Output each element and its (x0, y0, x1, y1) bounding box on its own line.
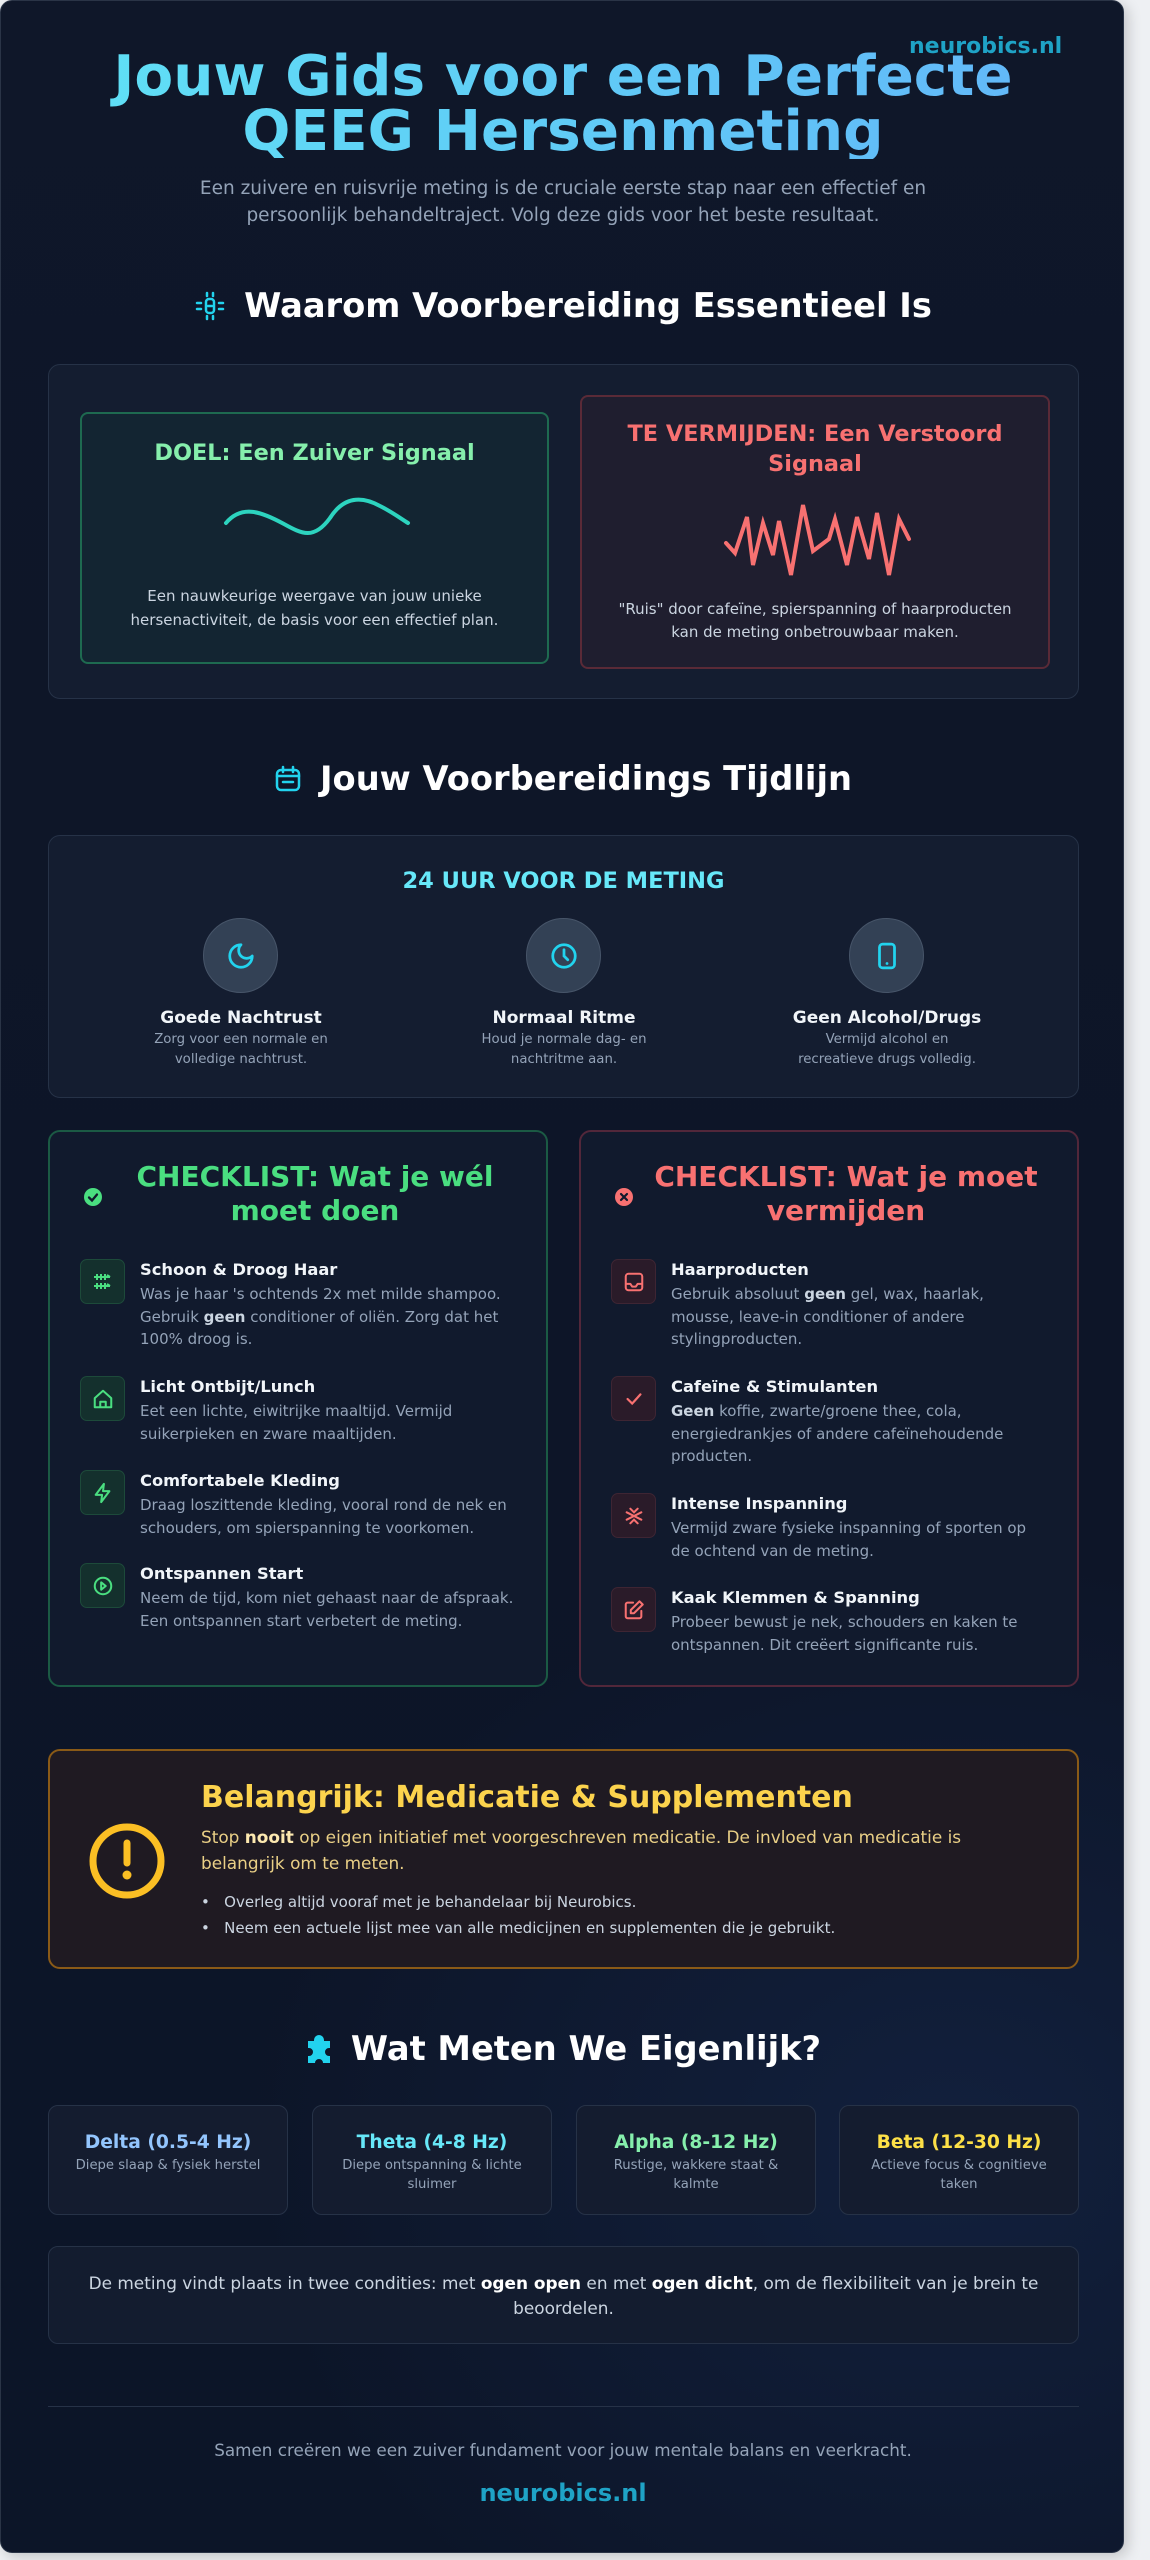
step: normal rhythm: Normaal Ritme (492, 1008, 635, 1028)
text block: conditions: beoordelen. (513, 2298, 614, 2318)
icon: phone (849, 918, 924, 993)
card: alpha: Rustige, wakkere staat & (614, 2158, 778, 2173)
icon: warning (90, 1824, 164, 1898)
title (1, 49, 1125, 159)
item: intense exercise: Vermijd zware fysieke inspanning of sporten op (671, 1519, 1026, 1537)
item: comfortable clothes: schouders, om spierspanning te voorkomen. (140, 1518, 474, 1536)
card: beta: Beta (12-30 Hz) (877, 2132, 1041, 2153)
panel: checklist avoid: CHECKLIST: Wat je moet (654, 1160, 1038, 1193)
item: clean hair: 100% droog is. (140, 1330, 252, 1348)
callout: medication: belangrijk om te meten. (201, 1853, 405, 1873)
brand: top right: neurobics.nl (909, 34, 1062, 59)
step: good sleep: Goede Nachtrust (160, 1008, 322, 1028)
item: caffeine: energiedrankjes of andere cafeïnehoudende (671, 1424, 1003, 1442)
step: normal rhythm: nachtritme aan. (511, 1052, 617, 1067)
item: hair products: Haarproducten (671, 1260, 809, 1279)
card: theta: Theta (4-8 Hz) (357, 2132, 507, 2153)
subtitle: persoonlijk behandeltraject. Volg deze gids voor het beste resultaat. (246, 205, 880, 226)
step: good sleep (154, 918, 328, 1067)
card: avoid noisy signal: TE VERMIJDEN: Een Verstoord (628, 421, 1002, 447)
card: goal clean signal: hersenactiviteit, de basis voor een effectief plan. (131, 611, 498, 629)
subtitle: Een zuivere en ruisvrije meting is de cruciale eerste stap naar een effectief en (200, 178, 926, 199)
panel: checklist avoid: vermijden (767, 1194, 925, 1227)
item: hair products: Gebruik absoluut geen gel, wax, haarlak, (671, 1285, 984, 1303)
item: clean hair: Schoon & Droog Haar (140, 1260, 337, 1279)
callout: medication: Stop nooit op eigen initiatief met voorgeschreven medicatie. De invloed van medicatie is (201, 1827, 961, 1847)
panel: timeline (48, 835, 1079, 1098)
card: avoid noisy signal: Signaal (768, 451, 862, 477)
card: delta: Delta (0.5-4 Hz) (85, 2132, 251, 2153)
card: avoid noisy signal: kan de meting onbetrouwbaar maken. (671, 623, 959, 641)
item: comfortable clothes: Draag loszittende kleding, vooral rond de nek en (140, 1496, 507, 1514)
panel: checklist avoid (579, 1130, 1079, 1687)
item: hair products: mousse, leave-in conditioner of andere (671, 1308, 964, 1326)
subtitle (200, 178, 926, 226)
item: light breakfast: suikerpieken en zware maaltijden. (140, 1424, 397, 1442)
card: goal clean signal: Een nauwkeurige weergave van jouw unieke (147, 587, 482, 605)
item: jaw clenching: Kaak Klemmen & Spanning (671, 1588, 920, 1607)
icon: puzzle (308, 2035, 330, 2063)
item: relaxed start: Ontspannen Start (140, 1564, 303, 1583)
callout: medication (48, 1749, 1079, 1969)
item: clean hair: Was je haar 's ochtends 2x met milde shampoo. (140, 1285, 501, 1303)
card: goal clean signal (80, 412, 549, 664)
card: alpha (576, 2105, 816, 2215)
step: normal rhythm: Houd je normale dag- en (482, 1032, 646, 1047)
item: comfortable clothes (80, 1470, 507, 1536)
title: QEEG Hersenmeting (242, 99, 884, 164)
panel: checklist do: CHECKLIST: Wat je wél (136, 1160, 494, 1193)
item: light breakfast: Licht Ontbijt/Lunch (140, 1377, 315, 1396)
card: avoid noisy signal (580, 395, 1050, 669)
item: jaw clenching: ontspannen. Dit creëert significante ruis. (671, 1636, 978, 1654)
heading: Wat Meten We: Wat Meten We Eigenlijk? (351, 2029, 821, 2068)
item: hair products (611, 1259, 984, 1348)
item: jaw clenching (611, 1587, 1017, 1654)
step: good sleep: volledige nachtrust. (175, 1052, 307, 1067)
callout: medication: • Overleg altijd vooraf met je behandelaar bij Neurobics. (201, 1893, 636, 1911)
callout: medication: • Neem een actuele lijst mee van alle medicijnen en supplementen die je gebruikt. (201, 1919, 835, 1937)
callout: medication: Belangrijk: Medicatie & Supplementen (201, 1780, 853, 1815)
item: clean hair (80, 1259, 501, 1348)
step: no alcohol (793, 918, 981, 1067)
item: caffeine: Cafeïne & Stimulanten (671, 1377, 878, 1396)
card: delta (48, 2105, 288, 2215)
card: delta: Diepe slaap & fysiek herstel (76, 2158, 260, 2173)
heading: Tijdlijn: Jouw Voorbereidings Tijdlijn (320, 759, 852, 798)
card: beta: taken (941, 2177, 977, 2192)
icon: calendar (276, 766, 300, 792)
panel: checklist do (48, 1130, 548, 1687)
text block: conditions: De meting vindt plaats in twee condities: met ogen open en met ogen dicht, om de flexibiliteit van je brein te (89, 2273, 1038, 2293)
item: caffeine: producten. (671, 1447, 752, 1465)
card: alpha: kalmte (673, 2177, 719, 2192)
item: relaxed start (80, 1563, 513, 1630)
panel: timeline: 24 UUR VOOR DE METING (403, 868, 724, 894)
card: beta (839, 2105, 1079, 2215)
icon: noisy wave (724, 504, 912, 576)
panel: checklist do: moet doen (231, 1194, 399, 1227)
step: good sleep: Zorg voor een normale en (154, 1032, 328, 1047)
text block: conditions (48, 2246, 1079, 2344)
footer text: Samen creëren we een zuiver fundament voor jouw mentale balans en veerkracht. (214, 2440, 912, 2460)
item: light breakfast: Eet een lichte, eiwitrijke maaltijd. Vermijd (140, 1402, 452, 1420)
icon: smooth wave (224, 498, 410, 535)
item: caffeine: Geen koffie, zwarte/groene thee, cola, (671, 1402, 962, 1420)
step: no alcohol: recreatieve drugs volledig. (798, 1052, 976, 1067)
step: normal rhythm (482, 918, 646, 1067)
card: alpha: Alpha (8-12 Hz) (614, 2132, 778, 2153)
item: comfortable clothes: Comfortabele Kleding (140, 1471, 340, 1490)
step: no alcohol: Geen Alcohol/Drugs (793, 1008, 981, 1028)
icon: chip (196, 292, 224, 320)
footer brand: neurobics.nl (479, 2479, 647, 2507)
item: intense exercise (611, 1493, 1026, 1560)
item: relaxed start: Neem de tijd, kom niet gehaast naar de afspraak. (140, 1589, 513, 1607)
heading: Waarom Voorbereiding: Waarom Voorbereiding Essentieel Is (244, 286, 932, 325)
card: theta: sluimer (408, 2177, 456, 2192)
item: intense exercise: de ochtend van de meting. (671, 1542, 874, 1560)
icon: x circle (615, 1188, 633, 1206)
card: avoid noisy signal: "Ruis" door cafeïne, spierspanning of haarproducten (618, 600, 1012, 618)
item: clean hair: Gebruik geen conditioner of oliën. Zorg dat het (140, 1308, 498, 1326)
item: jaw clenching: Probeer bewust je nek, schouders en kaken te (671, 1613, 1017, 1631)
card: theta (312, 2105, 552, 2215)
icon: check circle (84, 1188, 102, 1206)
panel: why preparation (48, 364, 1079, 699)
item: intense exercise: Intense Inspanning (671, 1494, 847, 1513)
item: hair products: stylingproducten. (671, 1330, 802, 1348)
item: caffeine (611, 1376, 1003, 1465)
title: Jouw Gids voor een Perfecte (113, 44, 1013, 109)
step: no alcohol: Vermijd alcohol en (826, 1032, 948, 1047)
icon: moon (203, 918, 278, 993)
item: relaxed start: Een ontspannen start verbetert de meting. (140, 1612, 462, 1630)
card: goal clean signal: DOEL: Een Zuiver Signaal (154, 440, 475, 466)
item: light breakfast (80, 1376, 452, 1442)
card: theta: Diepe ontspanning & lichte (342, 2158, 522, 2173)
card: beta: Actieve focus & cognitieve (871, 2158, 1047, 2173)
icon: clock (526, 918, 601, 993)
